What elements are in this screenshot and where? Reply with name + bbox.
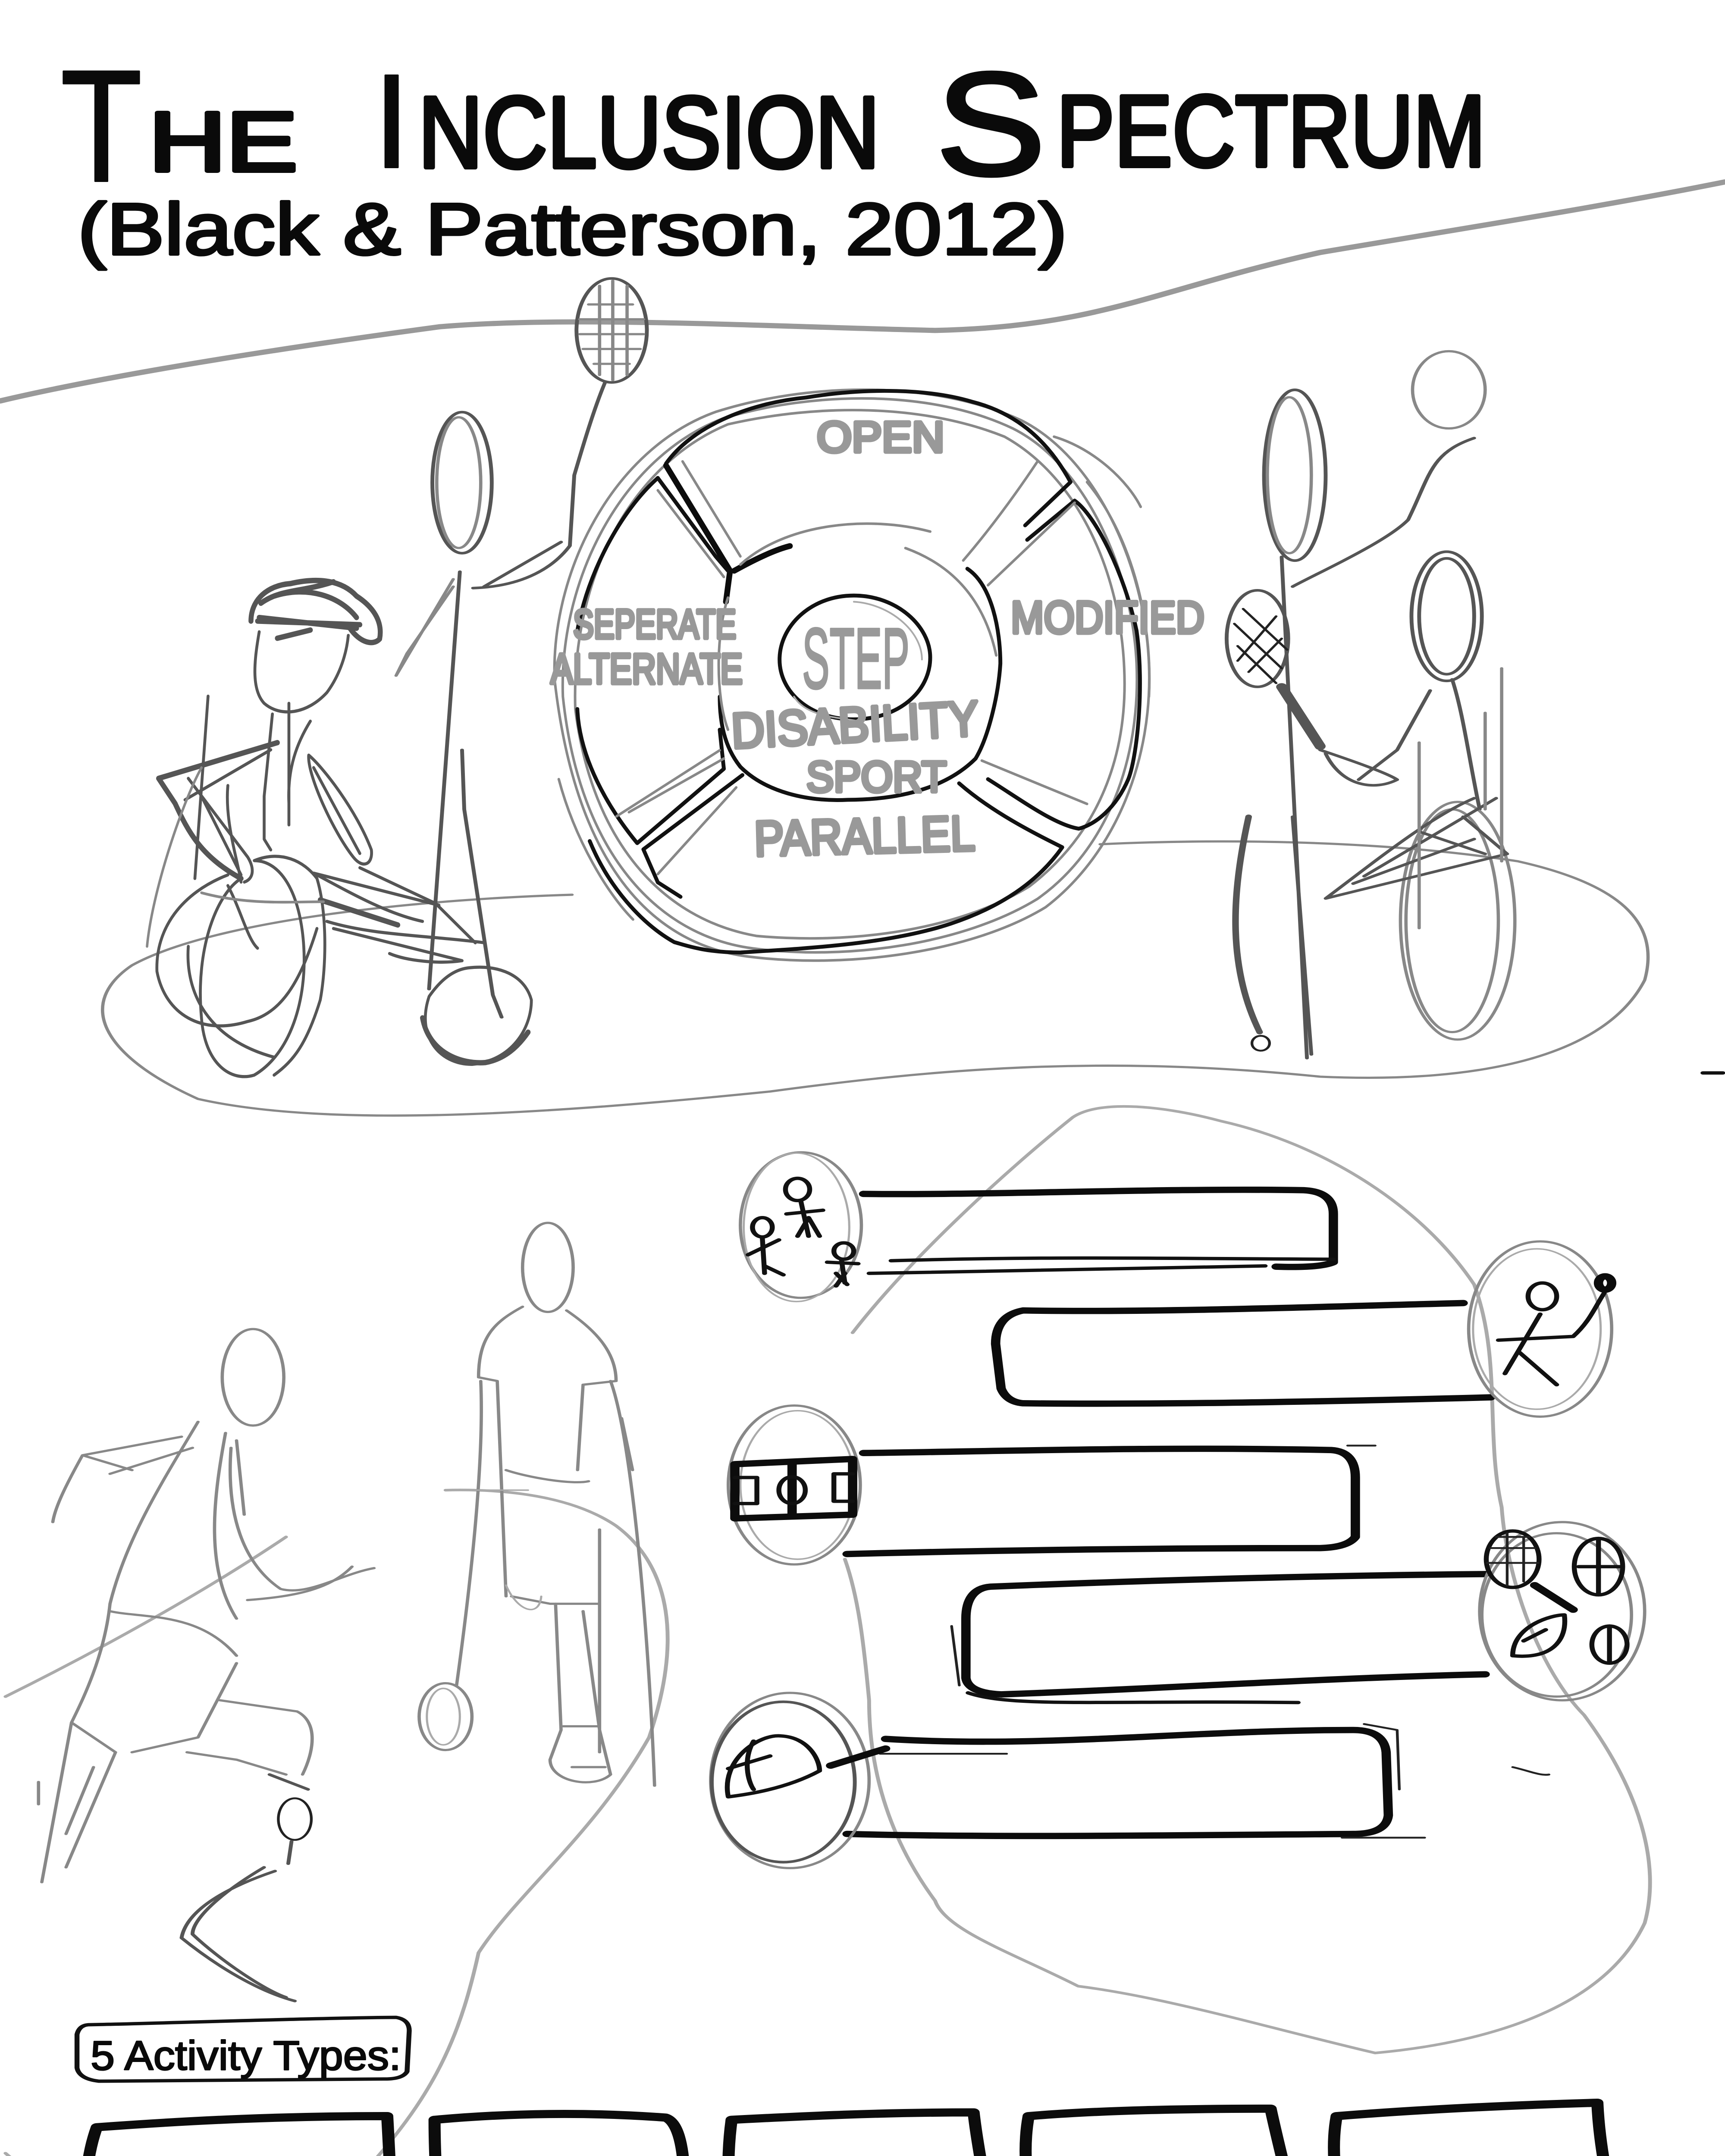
- bar 5: disability sport: [711, 1693, 1425, 1868]
- icon: hat scribble: [251, 580, 380, 642]
- title: I: [373, 46, 410, 196]
- card 1: [85, 2116, 392, 2156]
- card 2: [435, 2114, 695, 2156]
- panel: spectrum wheel: STEP: [802, 611, 910, 707]
- ground blob: [103, 841, 1648, 1116]
- title: [60, 37, 1486, 215]
- label: open: OPEN: [817, 413, 944, 461]
- title: NCLUSION: [418, 75, 880, 189]
- icon: racket right: [1226, 590, 1397, 785]
- card 3: [728, 2112, 1004, 2156]
- bar 2: modified: [996, 1241, 1612, 1416]
- small mark at right edge: [1703, 1072, 1723, 1073]
- label: disability: DISABILITY: [730, 691, 980, 759]
- label: separate: SEPERATE: [573, 602, 736, 647]
- callout: 5 activity types: 5 Activity Types:: [91, 2033, 401, 2079]
- large grey blob behind activity bars: [845, 1106, 1650, 2053]
- small mark right of bar 5: [1513, 1767, 1549, 1775]
- figure: runner with prosthetic leg: [38, 1329, 374, 2001]
- figure: wheelchair player: [147, 580, 531, 1077]
- panel: spectrum wheel: [551, 390, 1204, 961]
- label: sport: SPORT: [806, 753, 947, 801]
- icon: racket: [577, 279, 647, 382]
- icon: three stick people: [740, 1152, 861, 1301]
- callout: 5 activity types: [77, 2017, 409, 2081]
- bar 3: parallel: [728, 1406, 1375, 1564]
- icon: prosthetic knee and blade: [182, 1774, 311, 2001]
- card 5: [1334, 2103, 1628, 2156]
- figure: standing player with racket: [396, 279, 647, 1017]
- title: HE: [149, 95, 298, 189]
- label: alternate: ALTERNATE: [551, 645, 743, 693]
- top wave divider: [0, 182, 1725, 401]
- subtitle citation: (Black & Patterson, 2012): [78, 188, 1067, 270]
- title: T: [60, 37, 142, 215]
- left grey blob: [6, 1490, 668, 2156]
- figure: man on crutches: [419, 1223, 655, 1786]
- icon: stick player with racket: [1469, 1241, 1612, 1416]
- icon: assorted sports equipment: [1480, 1522, 1645, 1700]
- icon: cap: [711, 1693, 886, 1868]
- title: S: [936, 42, 1046, 206]
- figure: right seated player: [1226, 552, 1515, 1040]
- label: modified: MODIFIED: [1011, 592, 1204, 643]
- title: PECTRUM: [1057, 74, 1486, 188]
- icon: sports field: [728, 1406, 860, 1564]
- bar 1: open: [740, 1152, 1333, 1301]
- figure: right standing player: [1236, 351, 1485, 1058]
- card 4: [1026, 2109, 1304, 2156]
- bar 4: separate: [952, 1522, 1645, 1702]
- label: parallel: PARALLEL: [753, 806, 975, 867]
